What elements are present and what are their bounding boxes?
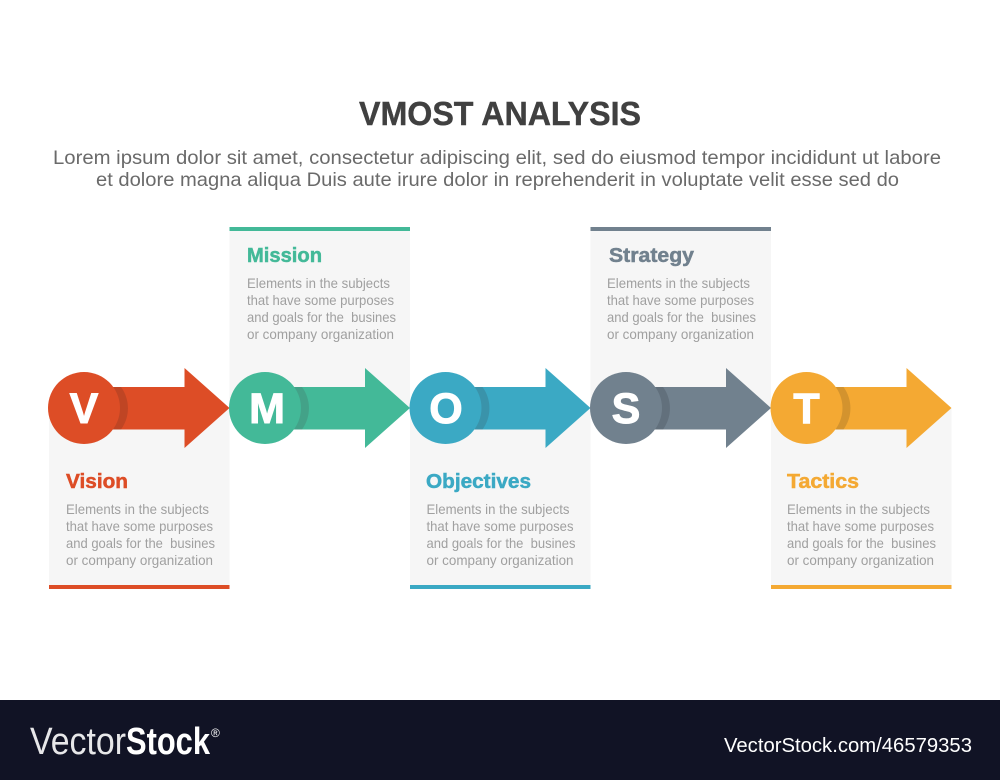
panel: mission	[230, 227, 410, 408]
arrow: S	[590, 368, 771, 448]
letter: O: O	[429, 385, 463, 433]
description: tactics: and goals for the busines	[787, 535, 936, 551]
heading: strategy: Strategy	[609, 245, 695, 267]
description: tactics: Elements in the subjects	[787, 501, 930, 517]
heading: vision: Vision	[66, 471, 128, 493]
description: strategy	[607, 275, 756, 342]
description: strategy: Elements in the subjects	[607, 275, 750, 291]
footer bar	[0, 700, 1000, 780]
description: vision: Elements in the subjects	[66, 501, 209, 517]
description: strategy: or company organization	[607, 326, 754, 342]
description: objectives	[426, 501, 576, 568]
description: vision	[66, 501, 215, 568]
heading: objectives: Objectives	[426, 471, 531, 493]
logo: VectorStock: ®	[211, 726, 220, 740]
description: tactics	[787, 501, 936, 568]
heading: mission: Mission	[247, 245, 322, 267]
title: VMOST ANALYSIS	[359, 95, 641, 132]
subtitle text	[53, 147, 941, 191]
description: strategy: that have some purposes	[607, 292, 754, 308]
footer url: VectorStock.com/46579353	[724, 735, 972, 757]
description: mission: Elements in the subjects	[247, 275, 390, 291]
description: tactics: that have some purposes	[787, 518, 934, 534]
description: vision: and goals for the busines	[66, 535, 215, 551]
description: mission: that have some purposes	[247, 292, 394, 308]
letter: V: V	[70, 385, 99, 433]
letter: T: T	[793, 385, 820, 433]
panel: strategy	[590, 227, 771, 408]
heading: tactics: Tactics	[787, 471, 859, 493]
panel: tactics	[771, 408, 952, 589]
arrow: T	[770, 368, 952, 448]
description: objectives: or company organization	[426, 552, 574, 568]
subtitle text: Lorem ipsum dolor sit amet, consectetur adipiscing elit, sed do eiusmod tempor incididunt ut labore	[53, 147, 941, 169]
description: mission	[247, 275, 396, 342]
description: tactics: or company organization	[787, 552, 934, 568]
description: mission: or company organization	[247, 326, 394, 342]
description: mission: and goals for the busines	[247, 309, 396, 325]
panel: objectives	[410, 408, 590, 589]
panel: vision	[49, 408, 230, 589]
logo: VectorStock: Stock	[126, 721, 211, 763]
subtitle text: et dolore magna aliqua Duis aute irure dolor in reprehenderit in voluptate velit esse sed do	[96, 169, 899, 191]
description: vision: or company organization	[66, 552, 213, 568]
logo: VectorStock: Vector	[30, 721, 126, 763]
description: vision: that have some purposes	[66, 518, 213, 534]
letter: S: S	[612, 385, 640, 433]
description: objectives: that have some purposes	[426, 518, 574, 534]
description: objectives: and goals for the busines	[426, 535, 576, 551]
description: strategy: and goals for the busines	[607, 309, 756, 325]
arrow: V	[48, 368, 230, 448]
letter: M: M	[249, 385, 285, 433]
logo: VectorStock	[30, 721, 220, 763]
arrow: O	[410, 368, 590, 448]
arrow: M	[229, 368, 410, 448]
description: objectives: Elements in the subjects	[426, 501, 570, 517]
